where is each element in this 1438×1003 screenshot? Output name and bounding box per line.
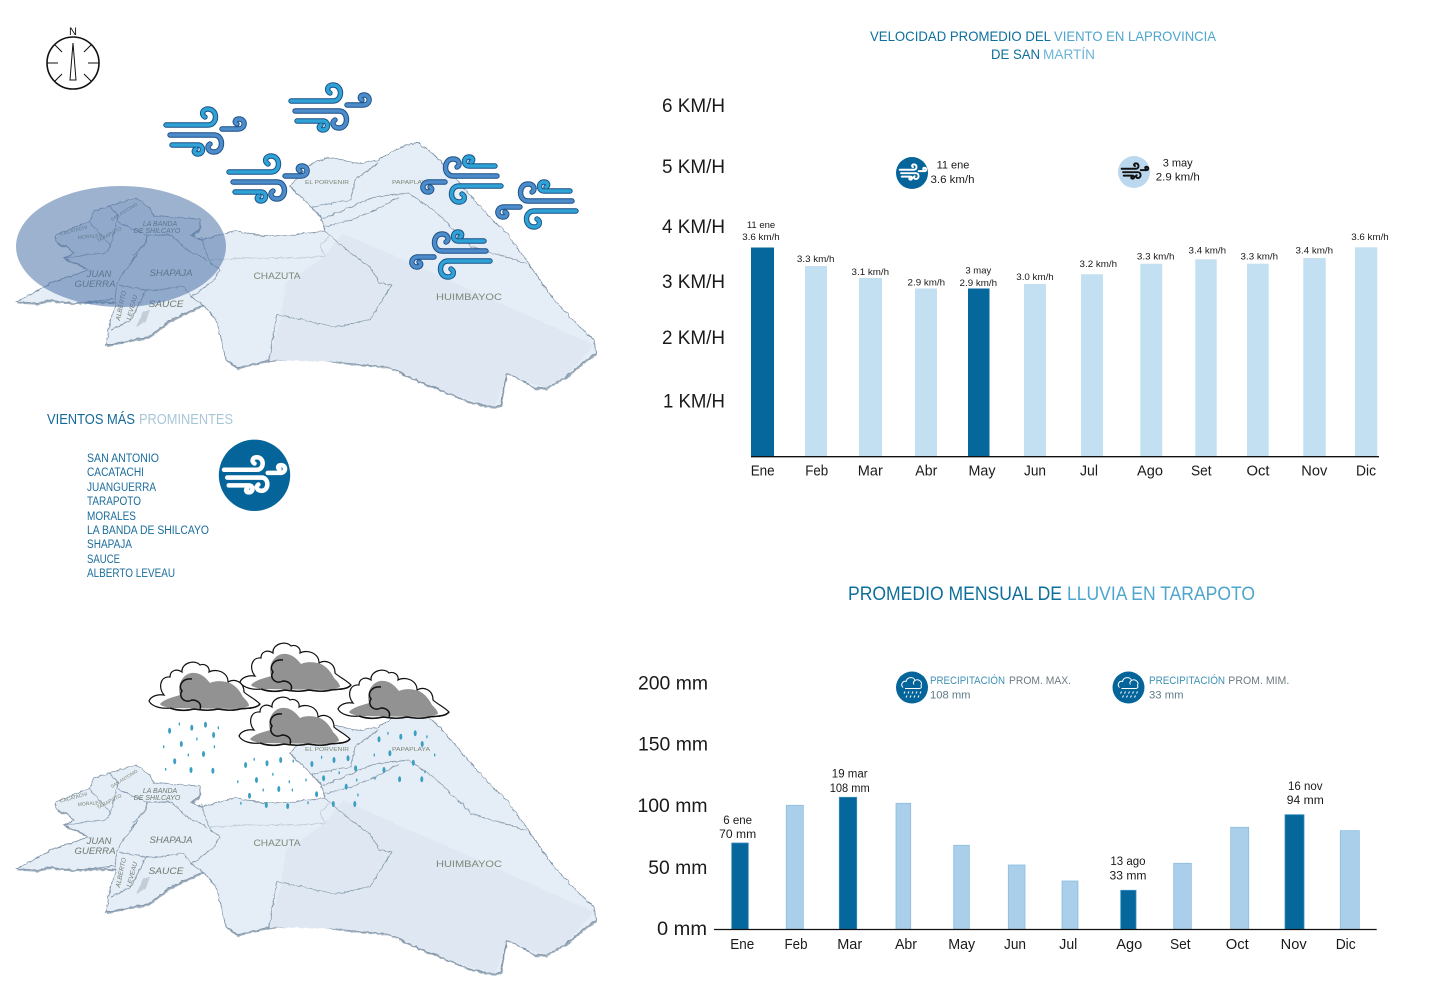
map labels: PAPAPLAYA — [392, 180, 430, 186]
map labels: LEVEAU — [126, 294, 139, 321]
y axis labels: 6 KM/H — [662, 96, 725, 117]
title: wind chart: DE SAN — [991, 46, 1040, 62]
month labels: Ene — [730, 937, 754, 953]
legend: wind min: 3 may — [1163, 158, 1193, 170]
map labels: DE SHILCAYO — [134, 228, 181, 235]
map labels: LEVEAU — [126, 861, 139, 888]
value labels: 16 nov — [1288, 781, 1323, 793]
map labels: CHAZUTA — [254, 271, 301, 282]
month labels: Mar — [858, 464, 883, 480]
month labels: Jul — [1080, 464, 1098, 480]
month labels: Mar — [837, 937, 862, 953]
value labels: 2.9 km/h — [960, 278, 997, 289]
month labels: Dic — [1336, 937, 1356, 953]
value labels: 3.3 km/h — [1137, 252, 1174, 262]
map: rain — [16, 710, 597, 976]
map labels: GUERRA — [74, 846, 116, 857]
icons: wind gusts over the map — [166, 85, 576, 277]
month labels: Oct — [1226, 937, 1249, 953]
legend: max rainfall: PRECIPITACIÓN — [930, 674, 1005, 687]
map labels: LA BANDA — [143, 221, 178, 228]
map labels: MORALES — [77, 233, 103, 241]
heading: vientos más prominentes — [47, 411, 233, 428]
legend: max rainfall: PROM. MAX. — [1009, 675, 1071, 687]
legend: wind min — [1118, 156, 1200, 188]
value labels: 108 mm — [830, 783, 870, 795]
value labels: 94 mm — [1287, 795, 1324, 807]
list of districts: SAUCE — [87, 554, 120, 566]
bar chart: rainfall — [638, 674, 1377, 953]
heading: vientos más prominentes: VIENTOS MÁS — [47, 411, 135, 428]
list of districts: LA BANDA DE SHILCAYO — [87, 525, 209, 537]
legend: wind max — [896, 157, 974, 189]
value labels: 3.3 km/h — [1241, 252, 1278, 262]
map labels — [59, 180, 502, 322]
title: rain chart — [848, 584, 1255, 605]
legend: min rainfall: PROM. MIM. — [1228, 675, 1289, 687]
month labels: Set — [1170, 937, 1191, 953]
legend: wind min: 2.9 km/h — [1156, 172, 1200, 184]
icons: rain clouds — [149, 643, 449, 745]
map labels: GUERRA — [74, 279, 116, 290]
title: wind chart — [870, 28, 1217, 62]
map labels: CHAZUTA — [254, 838, 301, 849]
y axis labels: 0 mm — [657, 919, 707, 940]
legend: min rainfall: PRECIPITACIÓN — [1149, 674, 1225, 687]
y axis labels: 100 mm — [638, 796, 708, 817]
list of districts: MORALES — [87, 511, 136, 523]
value labels: 2.9 km/h — [908, 278, 945, 288]
value labels: 3.1 km/h — [852, 267, 889, 278]
value labels: 3.0 km/h — [1016, 272, 1054, 283]
month labels: Ago — [1137, 464, 1163, 480]
map labels — [59, 747, 502, 889]
month labels: Jun — [1004, 937, 1026, 953]
axis line — [714, 928, 1377, 930]
month labels: Dic — [1356, 464, 1376, 480]
month labels: Ene — [751, 464, 775, 480]
list of districts: ALBERTO LEVEAU — [87, 568, 175, 580]
month labels: Feb — [805, 464, 828, 480]
heading: vientos más prominentes: PROMINENTES — [139, 412, 233, 428]
y axis labels: 150 mm — [638, 734, 708, 756]
month labels: Jul — [1059, 937, 1077, 953]
map labels: TARAPOTO — [96, 793, 123, 811]
map labels: SAN ANTONIO — [110, 201, 139, 222]
value labels: 11 ene — [747, 220, 775, 231]
map labels: HUIMBAYOC — [436, 292, 502, 303]
month labels: May — [948, 937, 976, 953]
value labels: 3.2 km/h — [1080, 259, 1117, 270]
title: wind chart: VIENTO EN LAPROVINCIA — [1054, 28, 1217, 44]
title: rain chart: PROMEDIO MENSUAL DE — [848, 584, 1062, 605]
y axis labels: 200 mm — [638, 674, 708, 694]
month labels: Ago — [1116, 937, 1142, 953]
map labels: HUIMBAYOC — [436, 859, 502, 870]
month labels: Abr — [895, 937, 917, 953]
compass: N — [69, 26, 77, 38]
legend: max rainfall — [896, 672, 1071, 704]
value labels: 3.4 km/h — [1296, 246, 1333, 256]
map labels: SHAPAJA — [150, 835, 192, 846]
map labels: CACATACHI — [59, 224, 88, 238]
map labels: EL PORVENIR — [305, 747, 349, 753]
y axis labels: 4 KM/H — [662, 217, 725, 238]
month labels: Jun — [1024, 464, 1046, 480]
rain drops — [163, 722, 435, 809]
value labels — [719, 768, 1324, 882]
legend: min rainfall: 33 mm — [1149, 690, 1184, 702]
month labels: Feb — [784, 937, 808, 953]
list of districts: TARAPOTO — [87, 496, 141, 508]
legend: wind max: 3.6 km/h — [930, 174, 974, 186]
month labels: May — [968, 464, 996, 480]
map labels: CACATACHI — [59, 791, 88, 805]
month labels: Nov — [1281, 937, 1307, 953]
map labels: SAUCE — [148, 299, 184, 310]
month labels — [751, 464, 1376, 480]
y axis labels: 50 mm — [648, 858, 707, 879]
map labels: PAPAPLAYA — [392, 747, 430, 753]
legend: wind max: 11 ene — [937, 160, 969, 172]
value labels: 3.4 km/h — [1189, 246, 1226, 256]
axis line — [751, 456, 1379, 458]
value labels: 70 mm — [719, 829, 756, 841]
list of districts: CACATACHI — [87, 467, 144, 479]
value labels — [742, 220, 1389, 289]
map labels: SHAPAJA — [150, 268, 192, 279]
list of districts: SAN ANTONIO — [87, 453, 159, 465]
value labels: 3.6 km/h — [742, 232, 780, 243]
map labels: MORALES — [77, 800, 103, 808]
month labels — [730, 937, 1356, 953]
title: wind chart: VELOCIDAD PROMEDIO DEL — [870, 28, 1051, 44]
bars — [751, 247, 1377, 456]
y axis labels: 5 KM/H — [662, 157, 725, 178]
map labels: SAN ANTONIO — [110, 768, 139, 789]
value labels: 6 ene — [723, 815, 752, 827]
y axis labels: 2 KM/H — [662, 328, 725, 349]
title: rain chart: LLUVIA EN TARAPOTO — [1067, 584, 1255, 605]
month labels: Abr — [915, 464, 937, 480]
map labels: ALBERTO — [115, 857, 128, 889]
list of districts: JUANGUERRA — [87, 482, 156, 494]
map labels: LA BANDA — [143, 788, 178, 795]
bar chart: wind speed — [662, 96, 1389, 480]
y axis labels — [638, 674, 708, 940]
map: wind — [16, 143, 597, 409]
list of districts: SHAPAJA — [87, 539, 132, 551]
y axis labels — [662, 96, 725, 412]
value labels: 3 may — [965, 266, 991, 276]
month labels: Nov — [1301, 464, 1328, 480]
map labels: JUAN — [86, 836, 112, 847]
value labels: 13 ago — [1110, 856, 1146, 868]
y axis labels: 1 KM/H — [663, 392, 725, 412]
map labels: DE SHILCAYO — [134, 795, 181, 802]
map labels: SAUCE — [148, 866, 184, 877]
month labels: Set — [1191, 464, 1212, 480]
map labels: EL PORVENIR — [305, 180, 349, 186]
bars — [732, 797, 1359, 929]
legend: min rainfall — [1112, 672, 1289, 704]
legend: max rainfall: 108 mm — [930, 690, 970, 702]
title: wind chart: MARTÍN — [1043, 46, 1095, 62]
icon: large wind circle — [219, 440, 290, 511]
list of districts — [87, 453, 209, 580]
value labels: 19 mar — [832, 768, 868, 780]
highlighted wind zone ellipse — [16, 186, 226, 307]
value labels: 33 mm — [1110, 870, 1146, 882]
value labels: 3.3 km/h — [797, 254, 834, 265]
y axis labels: 3 KM/H — [662, 272, 725, 293]
map labels: ALBERTO — [115, 290, 128, 322]
map labels: TARAPOTO — [96, 226, 123, 244]
compass — [47, 26, 99, 89]
month labels: Oct — [1246, 464, 1270, 480]
map labels: JUAN — [86, 269, 112, 280]
value labels: 3.6 km/h — [1351, 232, 1389, 243]
